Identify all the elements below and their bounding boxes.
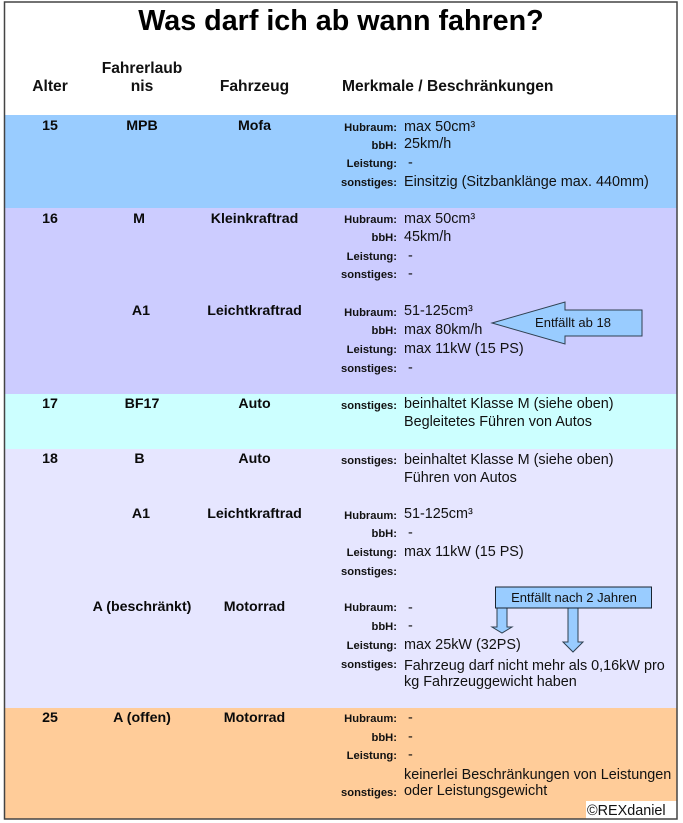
panel: age 18: Auto [238, 451, 271, 467]
panel: age 15: - [408, 155, 413, 171]
panel: age 15: Mofa [238, 118, 271, 134]
panel: age 25: bbH: [372, 732, 397, 744]
panel: age 25: A (offen) [113, 710, 171, 726]
panel: age 16: max 50cm³ [404, 211, 475, 227]
callout with arrows: Entfällt nach 2 Jahren [492, 587, 652, 652]
panel: age 18: A1 [132, 506, 150, 522]
panel: age 15: bbH: [372, 140, 397, 152]
panel: age 18: sonstiges: [341, 455, 397, 467]
callout with arrows: Entfällt nach 2 Jahren: Entfällt nach 2 Jahren [511, 590, 637, 605]
panel: age 18: - [408, 618, 413, 634]
panel: age 16: 45km/h [404, 229, 451, 245]
panel: age 17: sonstiges: [341, 400, 397, 412]
panel: age 18: Leistung: [347, 547, 397, 559]
panel: age 16: sonstiges: [341, 269, 397, 281]
panel: age 18: A (beschränkt) [93, 599, 192, 615]
panel: age 18: Hubraum: [344, 510, 397, 522]
panel: age 16: - [408, 266, 413, 282]
panel: age 16: Leichtkraftrad [207, 303, 302, 319]
panel: age 16: sonstiges: [341, 363, 397, 375]
panel: age 16: 16 [42, 211, 58, 227]
panel: age 18: Fahrzeug darf nicht mehr als 0,16kW pro [404, 658, 665, 674]
title: Was darf ich ab wann fahren? [138, 5, 544, 37]
panel: age 25: sonstiges: [341, 787, 397, 799]
panel: age 18: - [408, 600, 413, 616]
panel: age 18: max 11kW (15 PS) [404, 544, 524, 560]
panel: age 25: - [408, 710, 413, 726]
panel: age 18: Leistung: [347, 640, 397, 652]
panel: age 18: sonstiges: [341, 659, 397, 671]
callout arrow: Entfällt ab 18: Entfällt ab 18 [535, 315, 611, 330]
panel: age 16: - [408, 360, 413, 376]
panel: age 17: BF17 [125, 396, 159, 412]
panel: age 25: oder Leistungsgewicht [404, 783, 547, 799]
panel: age 25: Motorrad [224, 710, 285, 726]
table header: Alter [32, 78, 68, 95]
panel: age 16: Leistung: [347, 251, 397, 263]
panel: age 18: 18 [42, 451, 58, 467]
panel: age 18: Führen von Autos [404, 470, 517, 486]
panel: age 15: max 50cm³ [404, 119, 475, 135]
panel: age 18: sonstiges: [341, 566, 397, 578]
panel: age 25: Hubraum: [344, 713, 397, 725]
panel: age 18: Hubraum: [344, 602, 397, 614]
panel: age 16: max 11kW (15 PS) [404, 341, 524, 357]
panel: age 16: bbH: [372, 232, 397, 244]
table header [32, 60, 553, 95]
panel: age 15: MPB [126, 118, 158, 134]
table header: Fahrerlaub [102, 60, 182, 77]
panel: age 16: max 80km/h [404, 322, 482, 338]
panel: age 15: sonstiges: [341, 177, 397, 189]
panel: age 25: keinerlei Beschränkungen von Leistungen [404, 767, 671, 783]
panel: age 25 [5, 708, 677, 819]
panel: age 18: - [408, 525, 413, 541]
panel: age 15: 15 [42, 118, 58, 134]
table header: nis [131, 78, 154, 95]
panel: age 18: Motorrad [224, 599, 285, 615]
panel: age 17 [5, 394, 677, 449]
panel: age 25: - [408, 729, 413, 745]
panel: age 18: Leichtkraftrad [207, 506, 302, 522]
panel: age 16: Hubraum: [344, 307, 397, 319]
panel: age 17: 17 [42, 396, 58, 412]
panel: age 18: 51-125cm³ [404, 506, 473, 522]
panel: age 18: bbH: [372, 528, 397, 540]
panel: age 16: A1 [132, 303, 150, 319]
panel: age 17: Auto [238, 396, 271, 412]
panel: age 16: Leistung: [347, 344, 397, 356]
panel: age 18: B [134, 451, 145, 467]
table header: Merkmale / Beschränkungen [342, 78, 553, 95]
panel: age 25: - [408, 747, 413, 763]
panel: age 18: bbH: [372, 621, 397, 633]
callout arrow: Entfällt ab 18 [492, 302, 642, 344]
panel: age 16: 51-125cm³ [404, 303, 473, 319]
panel: age 17: Begleitetes Führen von Autos [404, 414, 592, 430]
copyright: ©REXdaniel [587, 803, 666, 819]
panel: age 16: bbH: [372, 325, 397, 337]
panel: age 15 [5, 115, 677, 208]
panel: age 18: kg Fahrzeuggewicht haben [404, 674, 577, 690]
panel: age 15: 25km/h [404, 136, 451, 152]
panel: age 17: beinhaltet Klasse M (siehe oben) [404, 396, 614, 412]
panel: age 16: - [408, 248, 413, 264]
panel: age 18: beinhaltet Klasse M (siehe oben) [404, 452, 614, 468]
panel: age 16 [5, 208, 677, 394]
panel: age 25: 25 [42, 710, 58, 726]
panel: age 18: max 25kW (32PS) [404, 637, 521, 653]
panel: age 15: Einsitzig (Sitzbanklänge max. 440mm) [404, 174, 649, 190]
panel: age 18 [5, 449, 677, 708]
panel: age 15: Hubraum: [344, 122, 397, 134]
table header: Fahrzeug [220, 78, 289, 95]
panel: age 15: Leistung: [347, 158, 397, 170]
panel: age 16: M [133, 211, 145, 227]
panel: age 25: Leistung: [347, 750, 397, 762]
panel: age 16: Hubraum: [344, 214, 397, 226]
panel: age 16: Kleinkraftrad [211, 211, 298, 227]
